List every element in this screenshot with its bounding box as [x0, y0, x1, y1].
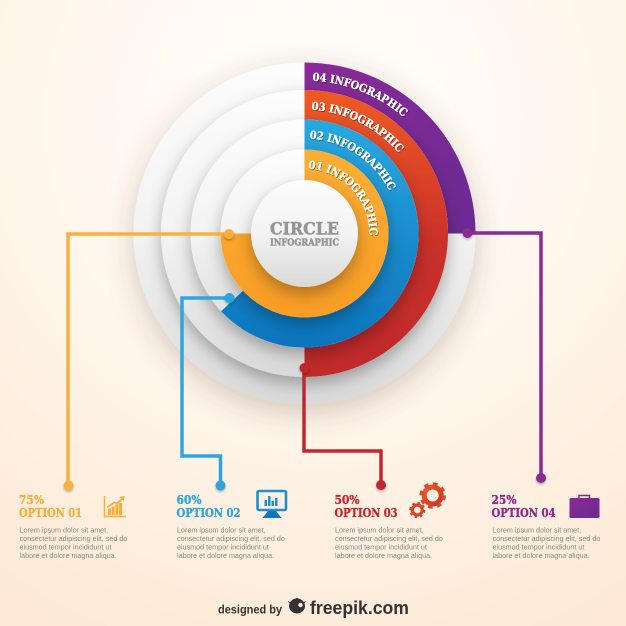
heading: OPTION 01: [19, 505, 82, 520]
body text: consectetur adipiscing elit, sed do: [335, 534, 443, 543]
connector: option 01: [64, 229, 234, 490]
body text: [335, 526, 443, 560]
outer disc with purple segment: [134, 62, 476, 404]
curved ring labels: 04 INFOGRAPHIC: [313, 72, 409, 117]
icon: freepik mascot: [288, 598, 306, 614]
panel: option 03: [334, 484, 444, 560]
body text: Lorem ipsum dolor sit amet,: [20, 526, 108, 534]
body text: labore et dolore magna aliqua.: [177, 551, 274, 560]
heading: [334, 492, 398, 520]
body text: [20, 526, 127, 560]
body text: eiusmod tempor incididunt ut: [335, 542, 427, 552]
footer logo: [218, 597, 409, 618]
icon: gears: [410, 484, 444, 517]
curved ring labels: 01 INFOGRAPHIC: [309, 160, 379, 236]
panel: option 02: [176, 491, 286, 560]
curved ring labels: 02 INFOGRAPHIC: [310, 130, 397, 191]
designed by label: designed by: [218, 602, 282, 616]
heading: OPTION 04: [492, 505, 556, 520]
panel: circle diagram: [118, 56, 490, 428]
panel: option 01: [19, 492, 127, 560]
first disc with orange segment: [220, 150, 388, 318]
curved ring labels: 03 INFOGRAPHIC: [312, 102, 405, 153]
heading: [492, 492, 556, 520]
body text: Lorem ipsum dolor sit amet,: [335, 526, 424, 534]
center title: INFOGRAPHIC: [270, 238, 339, 248]
heading: OPTION 03: [334, 505, 398, 520]
heading: [19, 492, 82, 520]
body text: eiusmod tempor incididunt ut: [177, 542, 269, 552]
heading: 25%: [492, 492, 517, 507]
freepik.com wordmark: freepik.com: [310, 597, 409, 618]
body text: labore et dolore magna aliqua.: [335, 551, 432, 560]
connector: option 03: [300, 363, 386, 490]
body text: consectetur adipiscing elit, sed do: [177, 534, 285, 543]
center title: CIRCLE: [270, 220, 339, 240]
icon: growth chart: [104, 496, 126, 516]
heading: 60%: [176, 492, 202, 507]
curved ring labels: [309, 72, 409, 236]
third disc with red segment: [161, 90, 448, 377]
body text: labore et dolore magna aliqua.: [20, 551, 117, 560]
connector: option 04: [462, 228, 546, 483]
icon: briefcase: [570, 496, 600, 518]
heading: 50%: [334, 492, 360, 507]
center disc: [251, 180, 358, 287]
heading: 75%: [19, 492, 44, 507]
body text: eiusmod tempor incididunt ut: [20, 542, 111, 552]
body text: Lorem ipsum dolor sit amet,: [177, 526, 266, 534]
second disc with blue segment: [190, 119, 419, 347]
body text: eiusmod tempor incididunt ut: [492, 542, 584, 552]
body text: [177, 526, 285, 560]
body text: labore et dolore magna aliqua.: [492, 551, 590, 560]
body text: Lorem ipsum dolor sit amet,: [492, 526, 581, 534]
center title: [270, 220, 339, 248]
panel: option 04: [492, 492, 600, 560]
connector: option 02: [182, 293, 234, 490]
body text: consectetur adipiscing elit, sed do: [20, 534, 127, 543]
heading: OPTION 02: [176, 505, 240, 520]
icon: monitor: [258, 491, 286, 518]
body text: consectetur adipiscing elit, sed do: [492, 534, 600, 543]
heading: [176, 492, 240, 520]
body text: [492, 526, 600, 560]
